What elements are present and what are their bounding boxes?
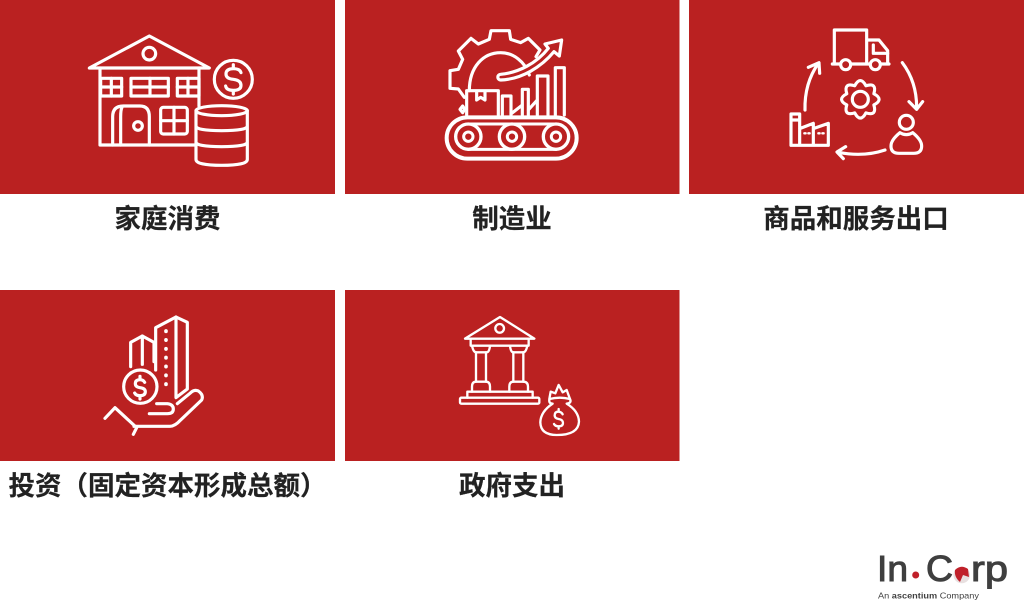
icon: supply cycle xyxy=(791,30,923,159)
heading: exports: 商品和服务出口 xyxy=(763,204,949,234)
heading: investment: 投资（固定资本形成总额） xyxy=(8,471,326,501)
heading: household consumption: 家庭消费 xyxy=(114,204,220,234)
logo: InCorp: An ascentium Company xyxy=(878,590,980,600)
icon: house with coins xyxy=(89,36,252,165)
logo: InCorp xyxy=(877,548,1008,600)
icon: government building and money bag xyxy=(460,317,579,435)
heading: government spending: 政府支出 xyxy=(459,471,565,501)
logo: InCorp: C xyxy=(926,548,953,589)
logo: InCorp: rp xyxy=(971,548,1008,589)
icon: gear conveyor and growth chart xyxy=(447,31,577,159)
icon: hand with buildings and coin xyxy=(105,317,202,434)
panel: government spending xyxy=(345,290,680,461)
panel: manufacturing xyxy=(345,0,680,194)
heading: manufacturing: 制造业 xyxy=(472,204,552,234)
panel: household consumption xyxy=(0,0,335,194)
panel: investment xyxy=(0,290,335,461)
panel: exports xyxy=(689,0,1024,194)
logo: InCorp: In xyxy=(877,548,908,589)
